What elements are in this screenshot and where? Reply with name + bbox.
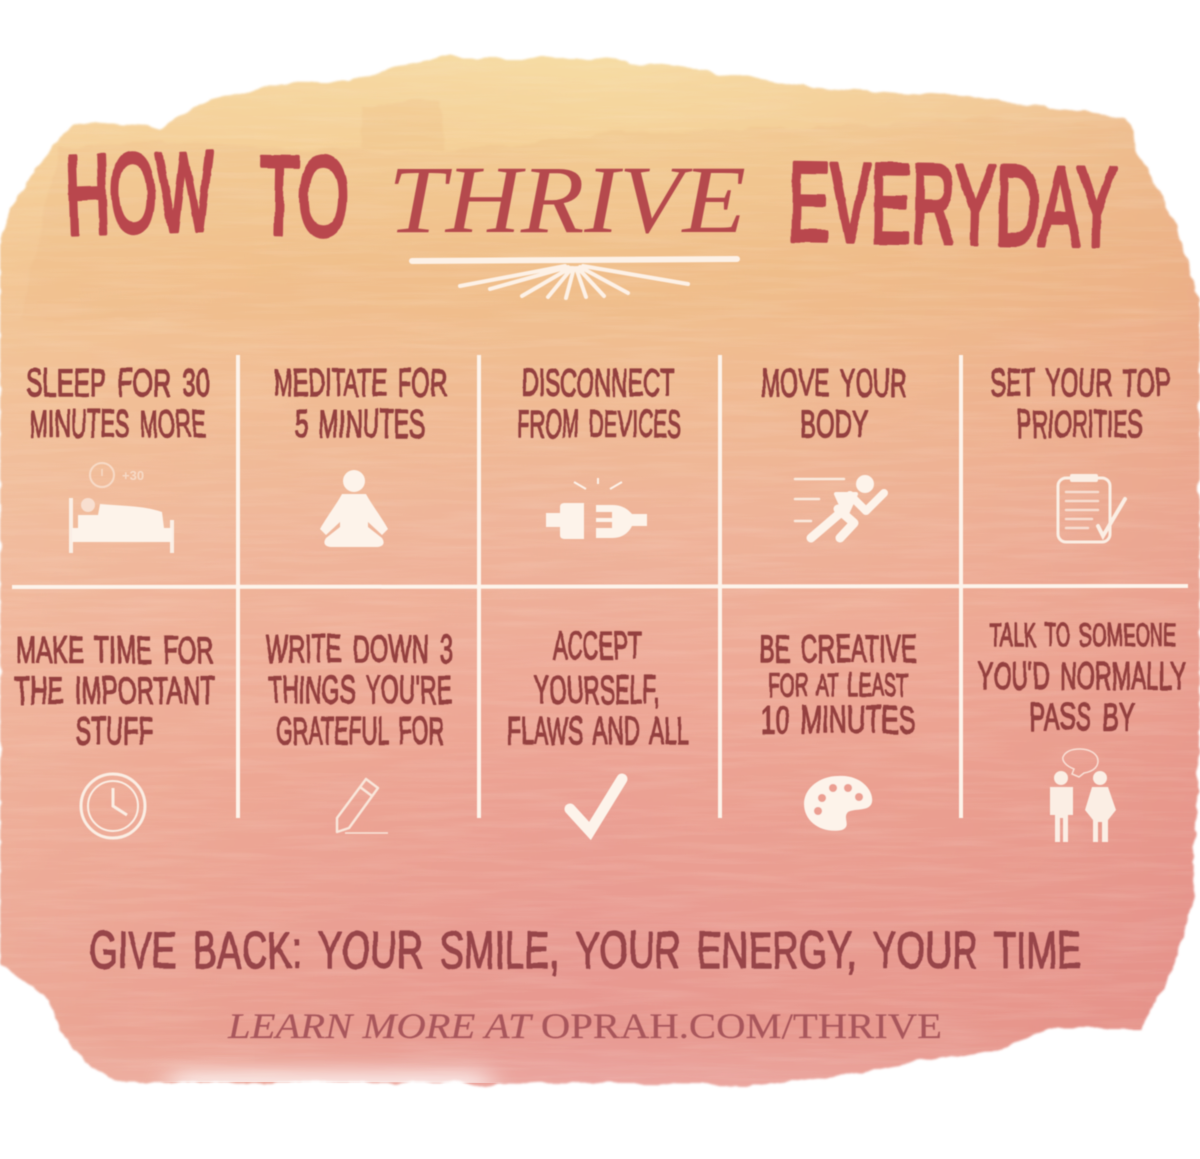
step: meditate: MEDITATE FOR [273, 362, 447, 405]
icon: check mark [570, 779, 622, 831]
icon: meditating person [320, 470, 388, 547]
step: talk: PASS BY [1029, 696, 1135, 739]
step: talk [978, 617, 1186, 739]
step: make time: THE IMPORTANT [15, 670, 215, 713]
title word: THRIVE: THRIVE [388, 146, 746, 253]
step: make time: STUFF [75, 710, 153, 753]
step: make time: MAKE TIME FOR [16, 629, 214, 672]
step: move [761, 362, 907, 446]
learn more footer: LEARN MORE AT OPRAH.COM/THRIVE [227, 1006, 942, 1046]
grid lines [12, 355, 1188, 818]
step: disconnect: FROM DEVICES [517, 403, 681, 446]
step: priorities [990, 362, 1170, 446]
step: accept: YOURSELF, [534, 669, 660, 712]
step: meditate [273, 362, 447, 446]
icon: pencil [337, 779, 388, 833]
icon: palette [804, 776, 872, 831]
icon: bed: +30 [122, 468, 144, 483]
step: write: WRITE DOWN 3 [265, 628, 453, 671]
step: make time [15, 629, 215, 753]
step: move: MOVE YOUR [761, 362, 907, 405]
step: sleep [26, 362, 210, 446]
step: creative: 10 MINUTES [761, 699, 915, 742]
step: accept: ACCEPT [553, 625, 641, 668]
icon: two people talking [1050, 749, 1116, 842]
step: creative: FOR AT LEAST [768, 667, 908, 703]
icon: plug [546, 478, 647, 539]
icon: running person [795, 475, 884, 538]
step: accept: FLAWS AND ALL [507, 710, 689, 753]
step: write [265, 628, 453, 753]
step: disconnect [517, 362, 681, 446]
step: disconnect: DISCONNECT [522, 362, 674, 405]
step: move: BODY [800, 403, 868, 446]
title [64, 128, 1118, 270]
icon: clipboard with check [1058, 474, 1125, 542]
sunburst divider [412, 259, 737, 298]
step: write: GRATEFUL FOR [276, 710, 444, 753]
step: accept [507, 625, 689, 753]
row 2 labels [15, 617, 1186, 753]
step: sleep: SLEEP FOR 30 [26, 362, 210, 405]
icon: bed [71, 463, 172, 553]
step: meditate: 5 MINUTES [295, 403, 425, 446]
step: write: THINGS YOU'RE [268, 669, 452, 712]
step: creative [759, 628, 917, 742]
step: sleep: MINUTES MORE [30, 403, 206, 446]
step: creative: BE CREATIVE [759, 628, 917, 671]
icon: clock [81, 774, 145, 838]
title word: HOW: HOW [64, 128, 216, 259]
title word: TO: TO [258, 133, 350, 260]
row 1 labels [26, 362, 1170, 446]
